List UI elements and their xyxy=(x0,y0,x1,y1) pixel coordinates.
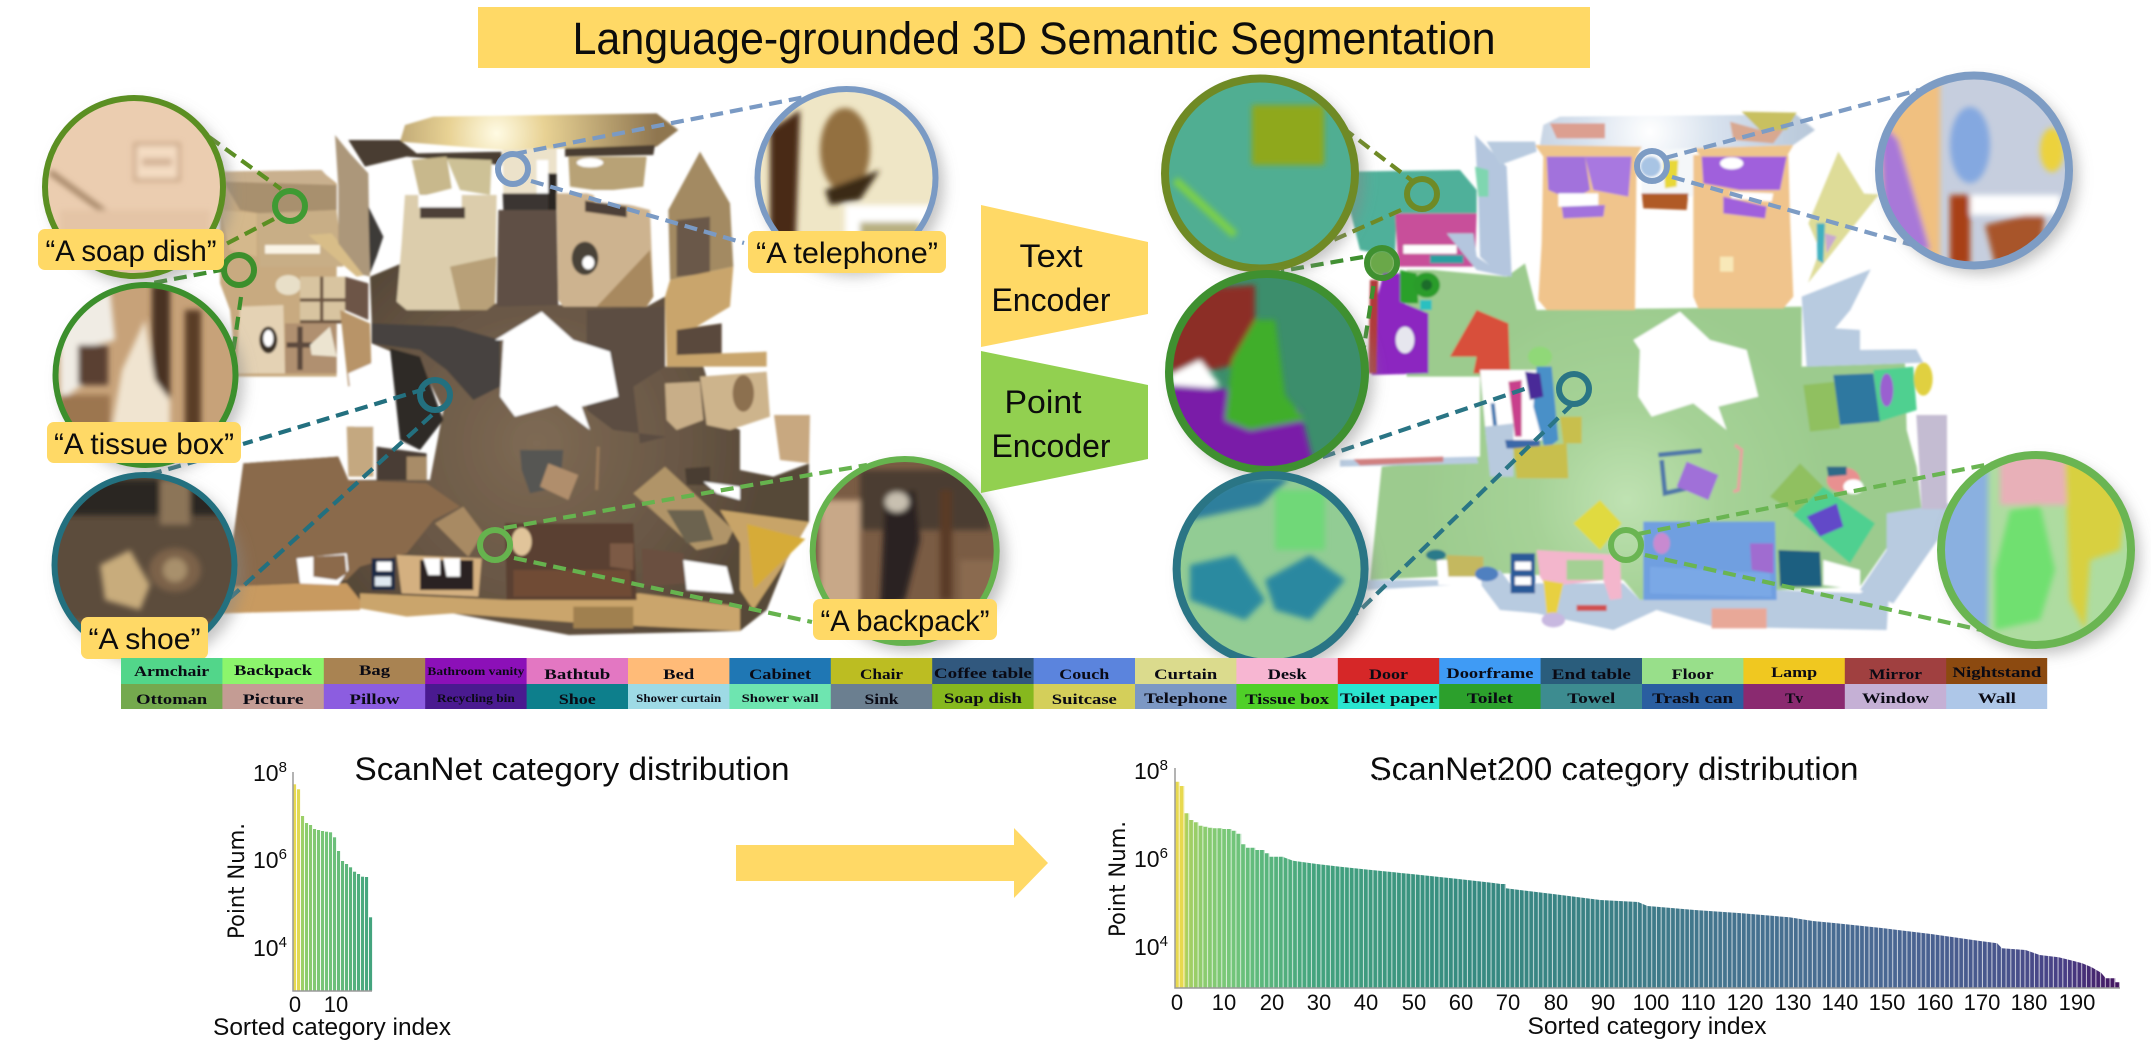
label: A telephone: “A telephone” xyxy=(756,237,938,270)
x axis ticks: 0 xyxy=(1171,990,1183,1015)
bathroom vanity xyxy=(1372,273,1428,375)
lower nightstand xyxy=(642,548,685,587)
desk and gaps xyxy=(348,357,390,442)
white hole in floor xyxy=(495,312,618,430)
legend of categories: Suitcase xyxy=(1052,692,1117,708)
bar chart: ScanNet200 distribution xyxy=(1106,757,2120,1040)
legend of categories: Recycling bin xyxy=(437,693,516,705)
rug xyxy=(1712,608,1767,628)
chart title: ScanNet: ScanNet category distribution xyxy=(354,751,790,787)
callout: segmented telephone xyxy=(1875,70,2078,275)
x axis ticks: 150 xyxy=(1869,990,1905,1015)
armchair xyxy=(1803,367,1917,432)
blue cabinet xyxy=(372,558,395,590)
label: A soap dish: “A soap dish” xyxy=(46,235,216,268)
legend of categories: Nightstand xyxy=(1952,665,2042,681)
desk and cabinet xyxy=(1480,347,1558,477)
yellow chair xyxy=(1573,500,1622,550)
legend of categories: Wall xyxy=(1978,691,2016,707)
x axis ticks: 50 xyxy=(1402,990,1426,1015)
callout: segmented soap dish xyxy=(1160,75,1364,277)
legend of categories: Tv xyxy=(1785,691,1804,707)
legend of categories: Bag xyxy=(359,663,391,679)
label: A shoe xyxy=(81,617,208,659)
legend of categories: Bed xyxy=(663,667,695,683)
dark floor band xyxy=(372,323,500,400)
x axis ticks: 10 xyxy=(324,992,348,1017)
label: A tissue box: “A tissue box” xyxy=(54,428,234,461)
legend of categories: Toilet paper xyxy=(1340,691,1437,707)
top wall xyxy=(1540,115,1815,150)
legend of categories: Lamp xyxy=(1771,665,1817,681)
legend of categories: Shoe xyxy=(559,692,596,708)
x axis ticks: 40 xyxy=(1354,990,1378,1015)
wood floor band bottom xyxy=(360,593,740,631)
center chair and pillow xyxy=(1658,445,1742,500)
bed 1 xyxy=(1535,145,1642,310)
table xyxy=(397,555,482,597)
legend of categories: Chair xyxy=(860,667,903,683)
yellow corner xyxy=(720,510,809,610)
left bedroom wall xyxy=(335,135,370,277)
desk xyxy=(1537,550,1622,627)
legend of categories: Couch xyxy=(1059,667,1110,683)
wood floor band left xyxy=(220,583,360,613)
bathroom xyxy=(220,170,368,377)
legend of categories: Window xyxy=(1862,691,1929,707)
chart title: ScanNet200: ScanNet200 category distribution xyxy=(1370,751,1858,787)
main floor xyxy=(220,263,809,635)
x axis ticks: 80 xyxy=(1544,990,1568,1015)
callout: soap dish photo xyxy=(40,90,232,285)
x axis ticks: 120 xyxy=(1727,990,1763,1015)
callout: segmented shoe xyxy=(1170,470,1373,672)
tissue box spot xyxy=(1369,250,1395,276)
callout: tissue box photo xyxy=(50,280,244,474)
legend of categories: Armchair xyxy=(134,664,210,680)
door xyxy=(1450,310,1510,397)
y axis ticks: 10 xyxy=(253,760,279,786)
lower right wall xyxy=(1860,503,1950,603)
bottom wall band xyxy=(1367,570,1890,630)
white gap right xyxy=(1823,560,1860,590)
legend of categories: Towel xyxy=(1567,691,1615,707)
red mirror area xyxy=(1368,280,1378,373)
y axis title: Point Num. xyxy=(225,823,250,939)
wall fragment xyxy=(1447,233,1507,277)
x axis title: Sorted category index xyxy=(1528,1013,1766,1040)
white floor gap right xyxy=(683,560,733,593)
curtain wall xyxy=(1808,152,1879,283)
y axis ticks xyxy=(253,759,287,961)
text encoder block: Text xyxy=(1020,238,1083,274)
x axis ticks: 130 xyxy=(1775,990,1811,1015)
bed 2 xyxy=(557,157,653,307)
legend of categories: Ottoman xyxy=(136,692,208,708)
x axis ticks: 90 xyxy=(1591,990,1615,1015)
couch xyxy=(505,523,637,600)
blue cabinet xyxy=(1511,553,1535,593)
center chair xyxy=(520,447,598,500)
y axis ticks xyxy=(1134,757,1168,960)
x axis ticks: 0 xyxy=(289,992,301,1017)
armchair xyxy=(665,372,770,430)
x axis ticks: 20 xyxy=(1260,990,1284,1015)
y axis ticks: 8 xyxy=(1160,757,1168,774)
label: A backpack: “A backpack” xyxy=(820,605,990,638)
curtain window wall xyxy=(668,152,733,280)
white floor gap left xyxy=(297,553,348,585)
legend of categories: Cabinet xyxy=(749,667,811,683)
bar gaps xyxy=(1175,778,2120,988)
y axis ticks: 10 xyxy=(1134,846,1160,872)
left chair xyxy=(435,507,483,557)
x axis ticks: 140 xyxy=(1822,990,1858,1015)
x axis ticks: 60 xyxy=(1449,990,1473,1015)
legend of categories: Tissue box xyxy=(1245,692,1330,708)
title banner: Language-grounded 3D Semantic Segmentation xyxy=(572,13,1496,64)
floor xyxy=(1370,263,1922,600)
panel: segmented 3D room xyxy=(1340,112,1950,630)
point encoder block: Encoder xyxy=(992,428,1111,464)
y axis ticks: 8 xyxy=(279,759,287,776)
legend of categories: Picture xyxy=(243,692,304,708)
callout: shoe photo xyxy=(50,470,243,664)
x axis title: Sorted category index xyxy=(213,1014,451,1041)
y axis ticks: 10 xyxy=(1134,934,1160,960)
right wall xyxy=(665,267,767,367)
x axis ticks: 100 xyxy=(1633,990,1669,1015)
far right strip xyxy=(774,415,810,463)
legend of categories: Pillow xyxy=(350,692,400,708)
legend of categories: Telephone xyxy=(1144,691,1228,707)
y axis ticks: 10 xyxy=(1134,758,1160,784)
callout: segmented tissue box xyxy=(1165,270,1374,479)
legend of categories: End table xyxy=(1552,667,1631,683)
y axis ticks: 6 xyxy=(279,846,287,863)
left bedroom wall xyxy=(1475,135,1512,277)
legend of categories: Bathroom vanity xyxy=(427,666,525,678)
y axis ticks: 10 xyxy=(253,935,279,961)
legend of categories: Backpack xyxy=(234,663,313,679)
bed 1 xyxy=(397,157,497,310)
text encoder block xyxy=(981,205,1148,347)
arrow between charts xyxy=(736,828,1048,898)
y axis ticks: 4 xyxy=(279,934,287,951)
suitcase and white gap xyxy=(1426,550,1498,585)
bar chart: ScanNet distribution xyxy=(213,759,451,1041)
callout: backpack photo xyxy=(810,455,1006,652)
legend of categories: Desk xyxy=(1268,667,1307,683)
x axis ticks: 30 xyxy=(1307,990,1331,1015)
bathtub xyxy=(1395,213,1477,267)
panel: RGB 3D room scan xyxy=(220,113,810,635)
lower left floor xyxy=(227,457,460,587)
lower nightstand xyxy=(1778,550,1822,587)
legend of categories: Coffee table xyxy=(934,666,1032,682)
dashed lines: right scene xyxy=(1281,90,1995,630)
legend of categories: Curtain xyxy=(1154,667,1218,683)
legend of categories: Toilet xyxy=(1467,691,1513,707)
lower right chair xyxy=(1770,463,1875,563)
legend of categories: Shower wall xyxy=(742,693,819,705)
legend of categories: Bathtub xyxy=(544,667,610,683)
rug xyxy=(573,607,633,628)
point encoder block: Point xyxy=(1004,384,1082,420)
x axis ticks xyxy=(289,992,348,1017)
legend of categories: Trash can xyxy=(1652,691,1734,707)
y axis ticks: 6 xyxy=(1160,845,1168,862)
legend of categories: Soap dish xyxy=(944,691,1023,707)
y axis ticks: 4 xyxy=(1160,933,1168,950)
lamp xyxy=(1914,362,1933,396)
yellow chairs xyxy=(1513,443,1568,478)
callout: segmented backpack xyxy=(1940,450,2140,654)
legend of categories: Sink xyxy=(864,692,899,708)
legend of categories: Door xyxy=(1369,667,1408,683)
bathroom shower wall xyxy=(1350,170,1477,257)
x axis ticks: 110 xyxy=(1680,990,1716,1015)
label: A shoe: “A shoe” xyxy=(88,623,200,656)
dashed lines: left scene xyxy=(137,97,867,622)
point encoder block xyxy=(981,351,1148,493)
callout: telephone photo xyxy=(755,85,945,276)
locator rings: right scene xyxy=(1367,151,1667,560)
x axis ticks: 180 xyxy=(2011,990,2047,1015)
x axis ticks: 170 xyxy=(1964,990,2000,1015)
x axis ticks: 160 xyxy=(1917,990,1953,1015)
toilet xyxy=(1400,270,1418,303)
couch xyxy=(1643,522,1777,600)
locator rings: left scene xyxy=(224,154,528,560)
legend of categories: Shower curtain xyxy=(636,693,722,705)
x axis ticks: 10 xyxy=(1212,990,1236,1015)
x axis ticks xyxy=(1171,990,2095,1015)
bed 2 xyxy=(1693,145,1793,308)
nightstand zone xyxy=(497,148,558,307)
legend of categories xyxy=(121,658,2047,709)
lower left wall xyxy=(340,310,372,387)
text encoder block: Encoder xyxy=(992,282,1111,318)
dark floor right xyxy=(587,307,667,443)
x axis ticks: 190 xyxy=(2059,990,2095,1015)
right wall xyxy=(1802,269,1923,367)
white hole in floor xyxy=(1633,312,1758,430)
lower right chair xyxy=(633,467,740,550)
x axis ticks: 70 xyxy=(1496,990,1520,1015)
right strip xyxy=(1916,415,1947,509)
top wall of bedroom xyxy=(400,113,678,150)
legend of categories: Mirror xyxy=(1869,667,1922,683)
wall strip xyxy=(1340,457,1478,467)
legend of categories: Doorframe xyxy=(1446,666,1534,682)
y axis title: Point Num. xyxy=(1106,821,1131,937)
nightstand zone xyxy=(1641,148,1693,210)
legend of categories: Floor xyxy=(1672,667,1714,683)
y axis ticks: 10 xyxy=(253,847,279,873)
headboard strip xyxy=(348,140,502,167)
